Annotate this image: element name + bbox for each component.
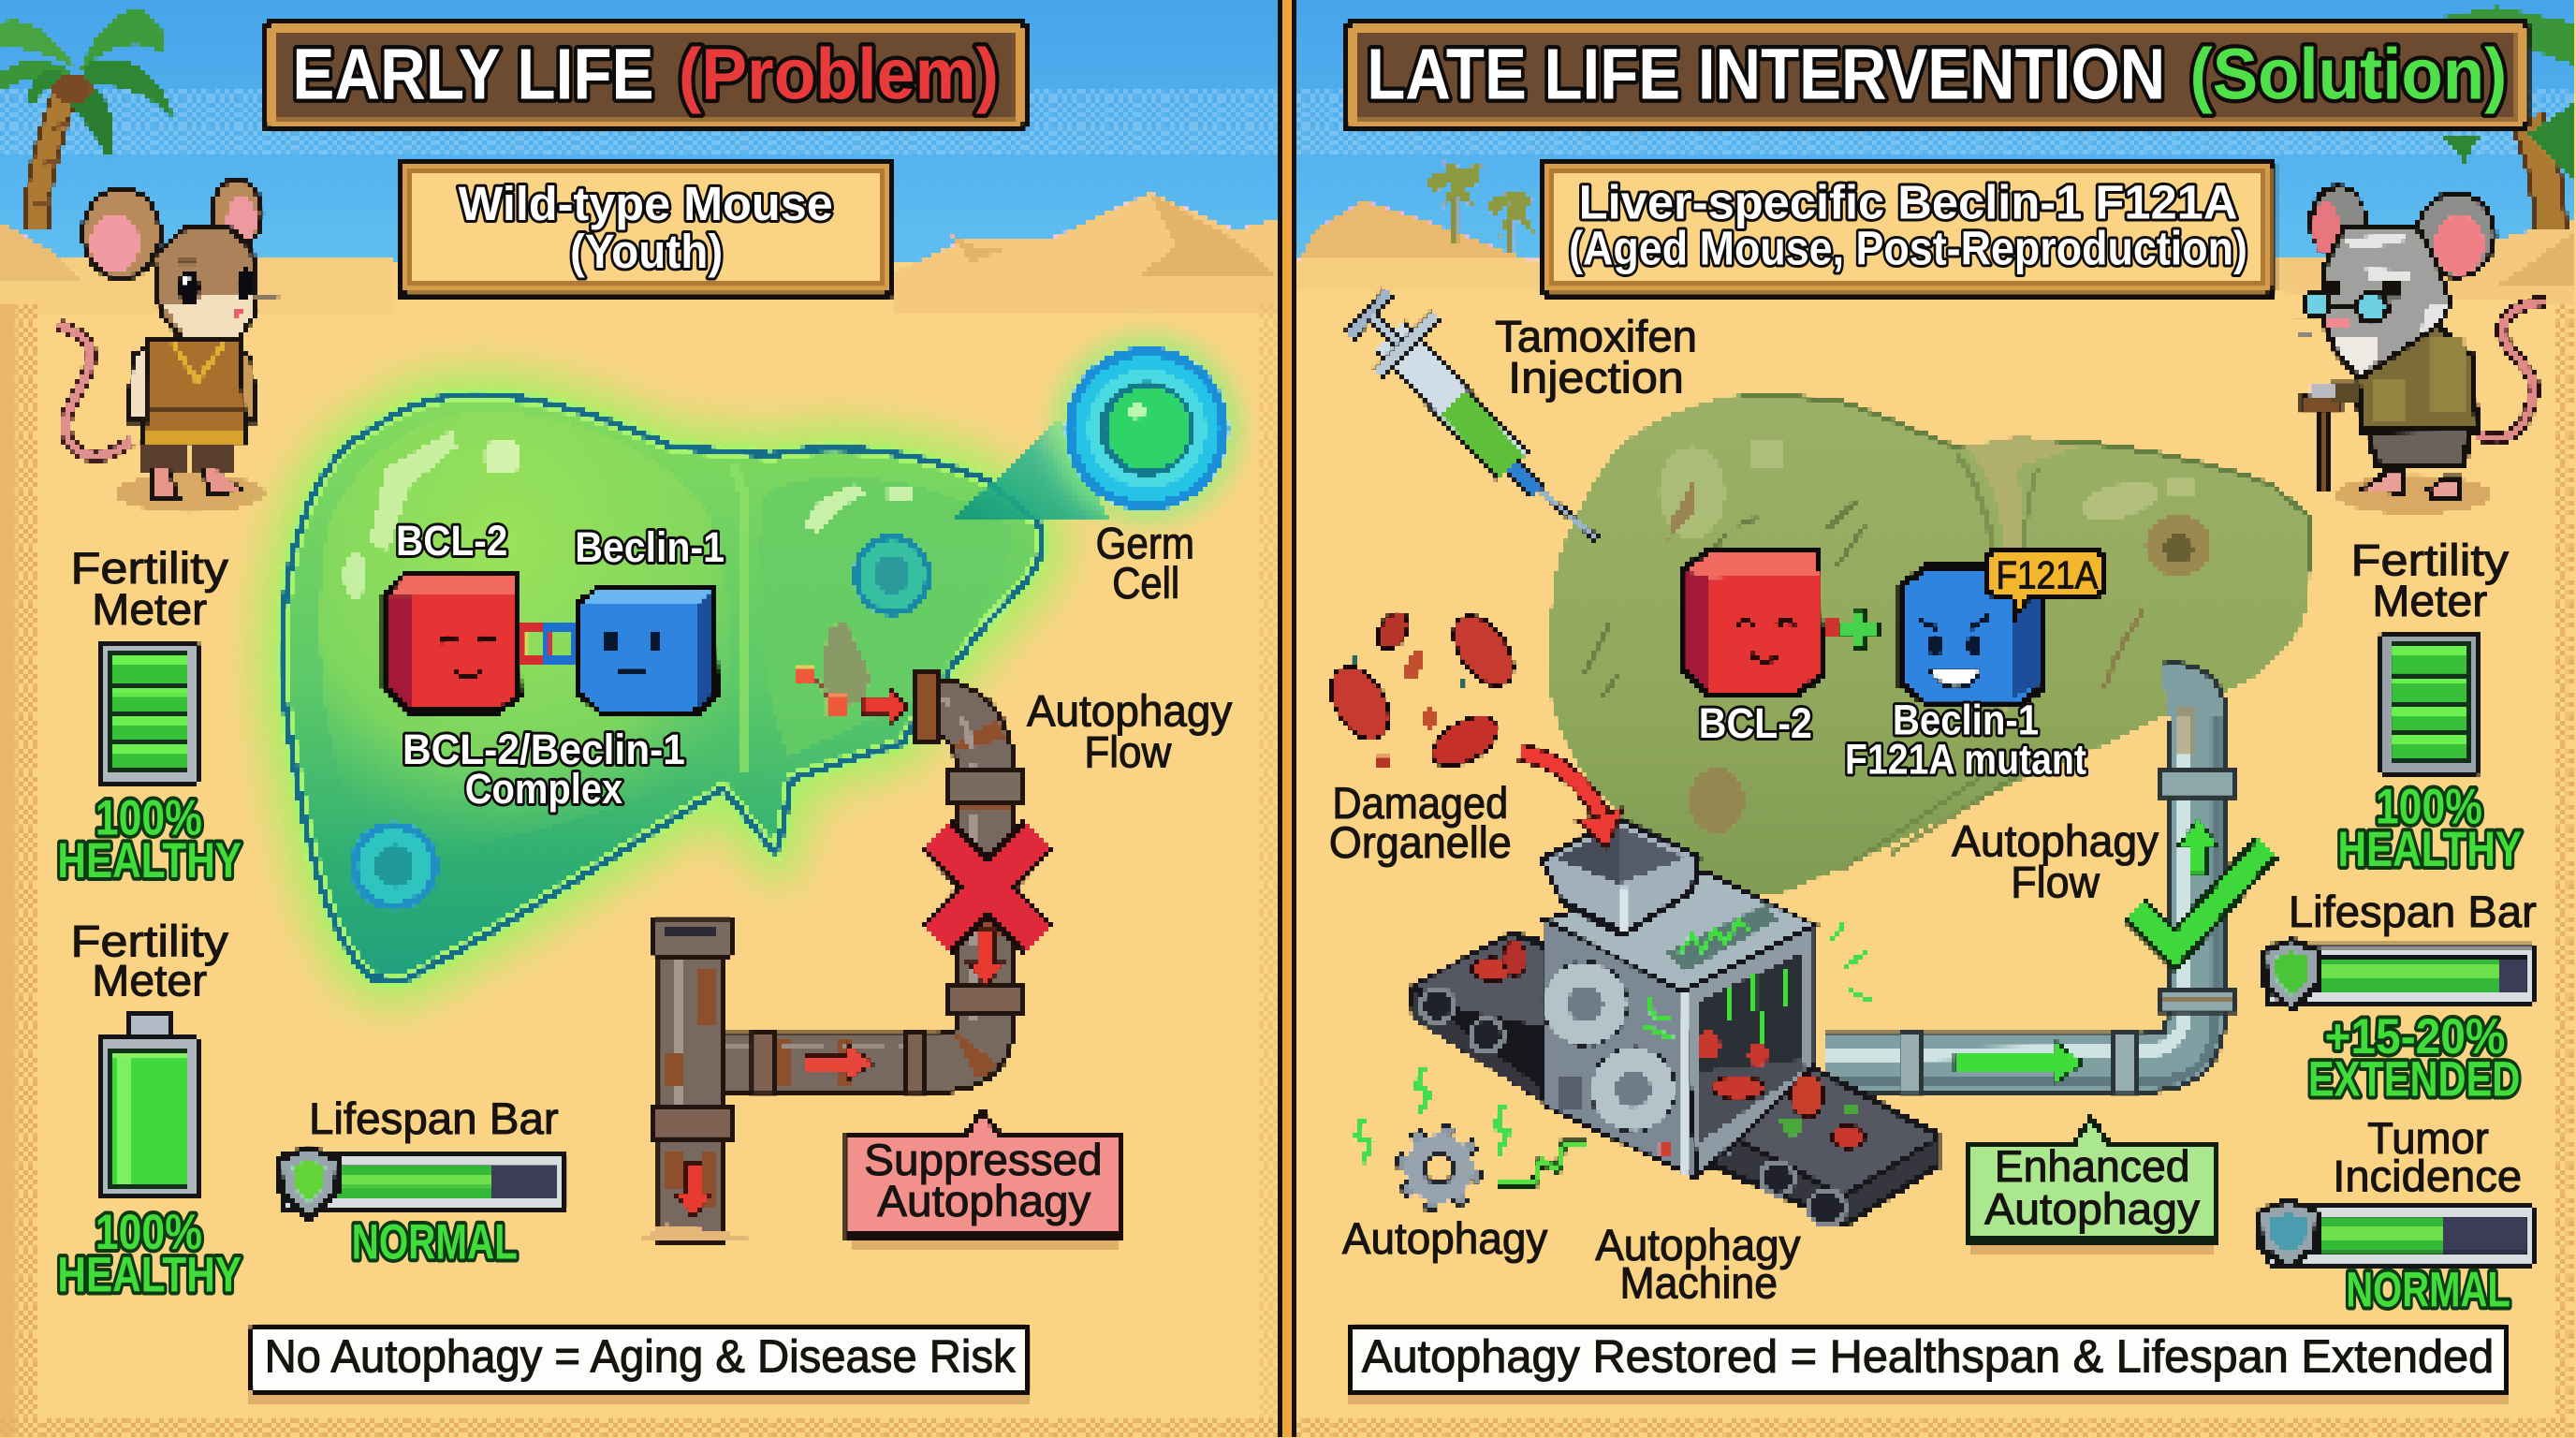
title right: (Solution) <box>2190 34 2507 114</box>
autophagy machine with conveyor <box>1410 753 1940 1227</box>
label autophagy machine <box>1595 1221 1801 1309</box>
label autophagy flow left: Autophagy <box>1027 687 1233 737</box>
labels on liver right: BCL-2 <box>1699 699 1812 747</box>
label autophagy flow right <box>1952 816 2159 907</box>
status healthy 1: 100% <box>95 791 202 846</box>
germ cell <box>953 333 1242 524</box>
status healthy right <box>2338 779 2522 877</box>
callout enhanced autophagy <box>1965 1112 2219 1254</box>
label tamoxifen injection: Tamoxifen <box>1495 313 1697 362</box>
F121A bubble text: F121A <box>1996 552 2098 596</box>
subtitle right: (Aged Mouse, Post-Reproduction) <box>1569 222 2247 275</box>
subtitle box right <box>1540 157 2277 299</box>
subtitle left <box>459 177 833 278</box>
label fertility meter right: Fertility <box>2351 536 2509 585</box>
label damaged organelle: Organelle <box>1329 818 1512 868</box>
label tamoxifen injection: Injection <box>1508 353 1684 403</box>
subtitle right <box>1569 175 2247 275</box>
text bottom left: No Autophagy = Aging & Disease Risk <box>265 1332 1016 1383</box>
label lifespan bar left: Lifespan Bar <box>309 1094 559 1144</box>
lifespan bar left <box>276 1144 568 1223</box>
label autophagy flow left <box>1027 687 1233 778</box>
palm tree left <box>0 9 174 230</box>
label autophagy flow left: Flow <box>1084 728 1172 778</box>
status healthy 2: 100% <box>95 1205 202 1260</box>
label germ cell: Germ <box>1096 520 1194 569</box>
bottom message box left <box>250 1323 1032 1405</box>
labels on liver left: Beclin-1 <box>575 523 724 571</box>
subtitle box left <box>396 157 896 299</box>
status normal right: NORMAL <box>2346 1262 2510 1317</box>
Beclin-1 blue cube left <box>575 583 720 716</box>
rusty pipe suppressed <box>633 670 1027 1244</box>
label lifespan bar left <box>309 1094 559 1269</box>
status healthy 2 <box>57 1205 242 1303</box>
healthy steel pipe <box>1823 693 2236 1097</box>
text suppressed autophagy: Autophagy <box>877 1177 1091 1226</box>
fertility battery right <box>2378 631 2482 775</box>
label autophagy gear: Autophagy <box>1342 1214 1548 1264</box>
label tumor incidence <box>2333 1114 2522 1201</box>
label lifespan bar left: NORMAL <box>352 1214 518 1269</box>
status healthy 1: HEALTHY <box>57 833 242 888</box>
label autophagy machine: Machine <box>1620 1259 1778 1309</box>
callout suppressed autophagy <box>844 1106 1123 1249</box>
text bottom right: Autophagy Restored = Healthspan & Lifespan Extended <box>1362 1332 2494 1383</box>
label fertility meter 2 <box>70 917 228 1006</box>
label germ cell: Cell <box>1112 559 1179 609</box>
labels on liver left: BCL-2 <box>396 517 507 565</box>
status healthy right: 100% <box>2376 779 2482 834</box>
center divider <box>1278 0 1297 1438</box>
title left: (Problem) <box>679 34 999 114</box>
label damaged organelle: Damaged <box>1332 779 1508 829</box>
subtitle right: Liver-specific Beclin-1 F121A <box>1579 175 2237 228</box>
young mouse <box>57 178 279 513</box>
F121A Beclin blue cube right <box>1897 564 2047 707</box>
status extended: EXTENDED <box>2308 1052 2520 1108</box>
labels on liver right: Beclin-1 <box>1893 697 2039 744</box>
title banner left <box>263 18 1029 133</box>
labels on liver right <box>1699 697 2086 784</box>
label fertility meter right: Meter <box>2372 577 2487 626</box>
label fertility meter 2: Fertility <box>70 917 228 966</box>
status healthy 2: HEALTHY <box>57 1248 242 1303</box>
status healthy 1 <box>57 791 242 888</box>
label tamoxifen injection <box>1495 313 1697 403</box>
bottom message box right <box>1347 1323 2509 1405</box>
labels on liver right: F121A mutant <box>1845 736 2086 784</box>
fertility battery 2 <box>97 1010 200 1199</box>
damaged organelles <box>1319 605 1525 776</box>
syringe <box>1349 292 1597 539</box>
BCL-2 red cube left <box>381 570 522 714</box>
fertility battery 1 <box>97 640 200 785</box>
labels on liver left: BCL-2/Beclin-1 <box>402 726 685 773</box>
text suppressed autophagy: Suppressed <box>864 1136 1103 1185</box>
small autophagy gear with sparks <box>1357 920 1873 1201</box>
label fertility meter right <box>2351 536 2509 626</box>
liver: aged olive <box>1547 394 2310 894</box>
label fertility meter 1: Meter <box>92 585 207 635</box>
title banner right <box>1344 18 2530 133</box>
subtitle left: Wild-type Mouse <box>459 177 833 230</box>
lifespan bar right <box>2261 936 2537 1014</box>
small cells in liver <box>350 534 931 910</box>
label damaged organelle <box>1329 779 1512 868</box>
label tumor incidence: Incidence <box>2333 1152 2522 1201</box>
tumor incidence bar right <box>2256 1196 2537 1271</box>
red X blocked flow <box>936 835 1038 940</box>
chain link between proteins <box>522 626 575 659</box>
green check mark <box>2134 846 2267 949</box>
old mouse with cane <box>2295 184 2546 514</box>
label autophagy flow right: Flow <box>2011 858 2100 907</box>
labels on liver left <box>396 517 724 813</box>
text enhanced autophagy: Enhanced <box>1995 1142 2190 1192</box>
label fertility meter 2: Meter <box>92 957 207 1006</box>
text suppressed autophagy <box>864 1136 1103 1226</box>
title left: EARLY LIFE <box>292 34 654 114</box>
subtitle left: (Youth) <box>570 225 723 278</box>
status healthy right: HEALTHY <box>2338 822 2522 877</box>
status extended <box>2308 1009 2520 1108</box>
title right: LATE LIFE INTERVENTION <box>1367 34 2165 114</box>
labels on liver left: Complex <box>465 765 623 813</box>
F121A speech bubble <box>1984 547 2106 624</box>
status extended: +15-20% <box>2324 1009 2506 1064</box>
label fertility meter 1: Fertility <box>70 544 228 594</box>
liver: young healthy glowing <box>282 394 1042 981</box>
label lifespan bar right: Lifespan Bar <box>2289 888 2537 937</box>
label autophagy flow right: Autophagy <box>1952 816 2159 866</box>
text enhanced autophagy: Autophagy <box>1984 1185 2200 1235</box>
BCL-2 red cube right with plus <box>1680 547 1881 698</box>
label fertility meter 1 <box>70 544 228 635</box>
title left <box>292 34 999 114</box>
text enhanced autophagy <box>1984 1142 2200 1235</box>
label tumor incidence: Tumor <box>2367 1114 2489 1164</box>
label germ cell <box>1096 520 1194 609</box>
small palms and palm tree right <box>1426 7 2576 253</box>
label autophagy machine: Autophagy <box>1595 1221 1801 1270</box>
